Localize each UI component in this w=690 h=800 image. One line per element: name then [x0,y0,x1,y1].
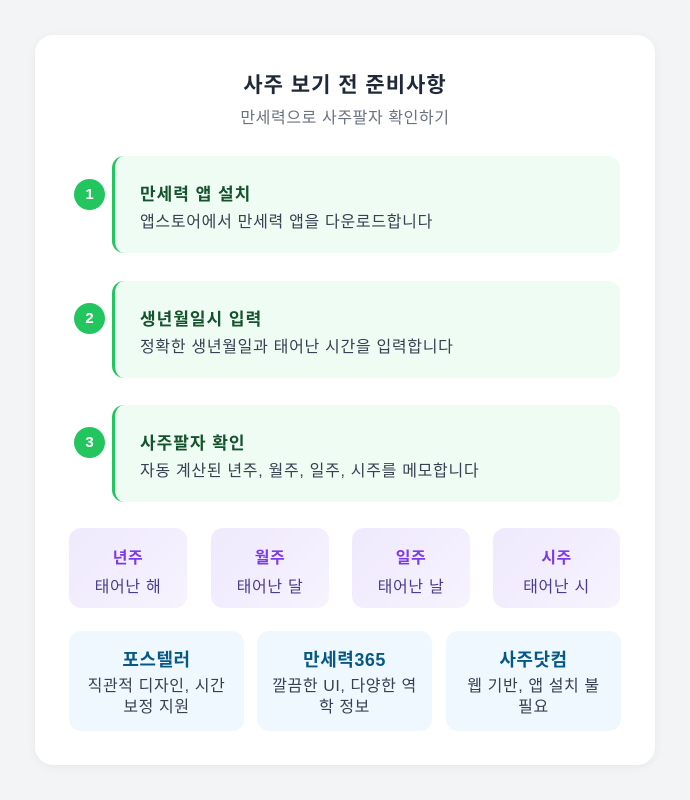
step 3: 자동 계산된 년주, 월주, 일주, 시주를 메모합니다 [140,463,479,480]
app: 포스텔러 [69,631,244,731]
step 1: 만세력 앱 설치 [140,185,251,204]
app: 사주닷컴: 웹 기반, 앱 설치 불필요 [467,678,600,716]
number badge 1 [74,179,105,210]
pillar: 월주 [211,528,329,608]
pillar: 시주: 태어난 시 [523,579,590,596]
app: 포스텔러: 직관적 디자인, 시간 보정 지원 [88,678,225,716]
pillar: 월주: 태어난 달 [237,579,303,596]
step 2 [112,281,620,378]
number badge 2 [74,303,105,334]
pillar: 시주: 시주 [541,550,572,567]
title: 사주 보기 전 준비사항 [243,74,447,97]
pillar: 일주 [352,528,470,608]
pillar: 일주: 태어난 날 [378,579,444,596]
step 1 [112,156,620,253]
number badge 2: 2 [85,310,94,327]
step 2: 생년월일시 입력 [140,310,262,329]
pillar: 년주 [69,528,187,608]
app: 만세력365 [257,631,432,731]
pillar: 년주: 태어난 해 [95,579,161,596]
step 2: 정확한 생년월일과 태어난 시간을 입력합니다 [140,339,454,356]
pillar: 월주: 월주 [255,550,285,567]
pillar: 년주: 년주 [113,550,143,567]
app: 포스텔러: 포스텔러 [122,650,191,670]
pillar: 시주 [493,528,620,608]
app: 사주닷컴: 사주닷컴 [499,650,568,670]
number badge 3: 3 [85,434,94,451]
step 3 [112,405,620,502]
app: 만세력365: 만세력365 [303,650,386,670]
app: 만세력365: 깔끔한 UI, 다양한 역학 정보 [272,678,417,716]
step 3: 사주팔자 확인 [140,434,246,453]
step 1: 앱스토어에서 만세력 앱을 다운로드합니다 [140,214,433,231]
number badge 3 [74,427,105,458]
pillar: 일주: 일주 [396,550,426,567]
subtitle: 만세력으로 사주팔자 확인하기 [240,110,450,127]
app: 사주닷컴 [446,631,621,731]
number badge 1: 1 [85,186,94,203]
